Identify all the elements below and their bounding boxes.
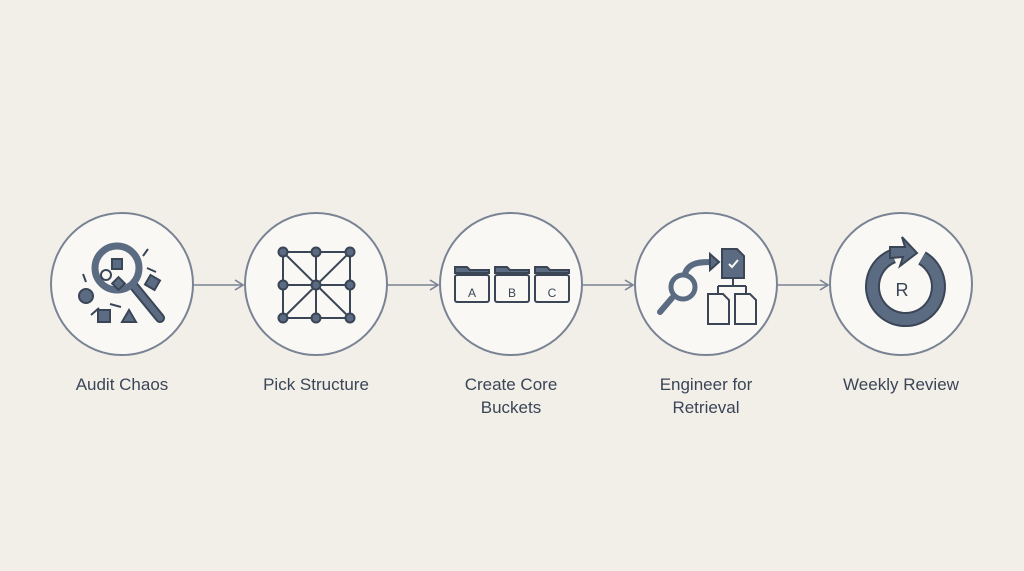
labels: Pick Structure xyxy=(263,375,369,394)
icon: three folders A B C: C xyxy=(548,286,557,300)
icon: three folders A B C xyxy=(455,267,569,302)
labels: Engineer for xyxy=(660,375,753,394)
step 3: Create Core Buckets xyxy=(440,213,582,355)
icon: search arrow to documents xyxy=(660,249,756,324)
icon: three folders A B C: A xyxy=(468,286,476,300)
icon: grid network xyxy=(278,248,354,322)
labels: Audit Chaos xyxy=(76,375,168,394)
labels: Retrieval xyxy=(672,398,740,417)
labels: Weekly Review xyxy=(843,375,960,394)
labels xyxy=(76,375,960,417)
icon: magnifier with scattered shapes xyxy=(79,246,160,322)
step 4: Engineer for Retrieval xyxy=(635,213,777,355)
icon: three folders A B C: B xyxy=(508,286,516,300)
step 5: Weekly Review xyxy=(830,213,972,355)
labels: Create Core xyxy=(465,375,557,394)
step 1: Audit Chaos xyxy=(51,213,193,355)
icon: circular arrow with R: R xyxy=(896,280,908,300)
arrow 4 xyxy=(778,284,828,286)
arrow 1 xyxy=(193,284,243,286)
arrow 2 xyxy=(388,284,438,286)
labels: Buckets xyxy=(481,398,541,417)
icon: circular arrow with R xyxy=(872,237,938,320)
step 2: Pick Structure xyxy=(245,213,387,355)
arrow 3 xyxy=(583,284,633,286)
